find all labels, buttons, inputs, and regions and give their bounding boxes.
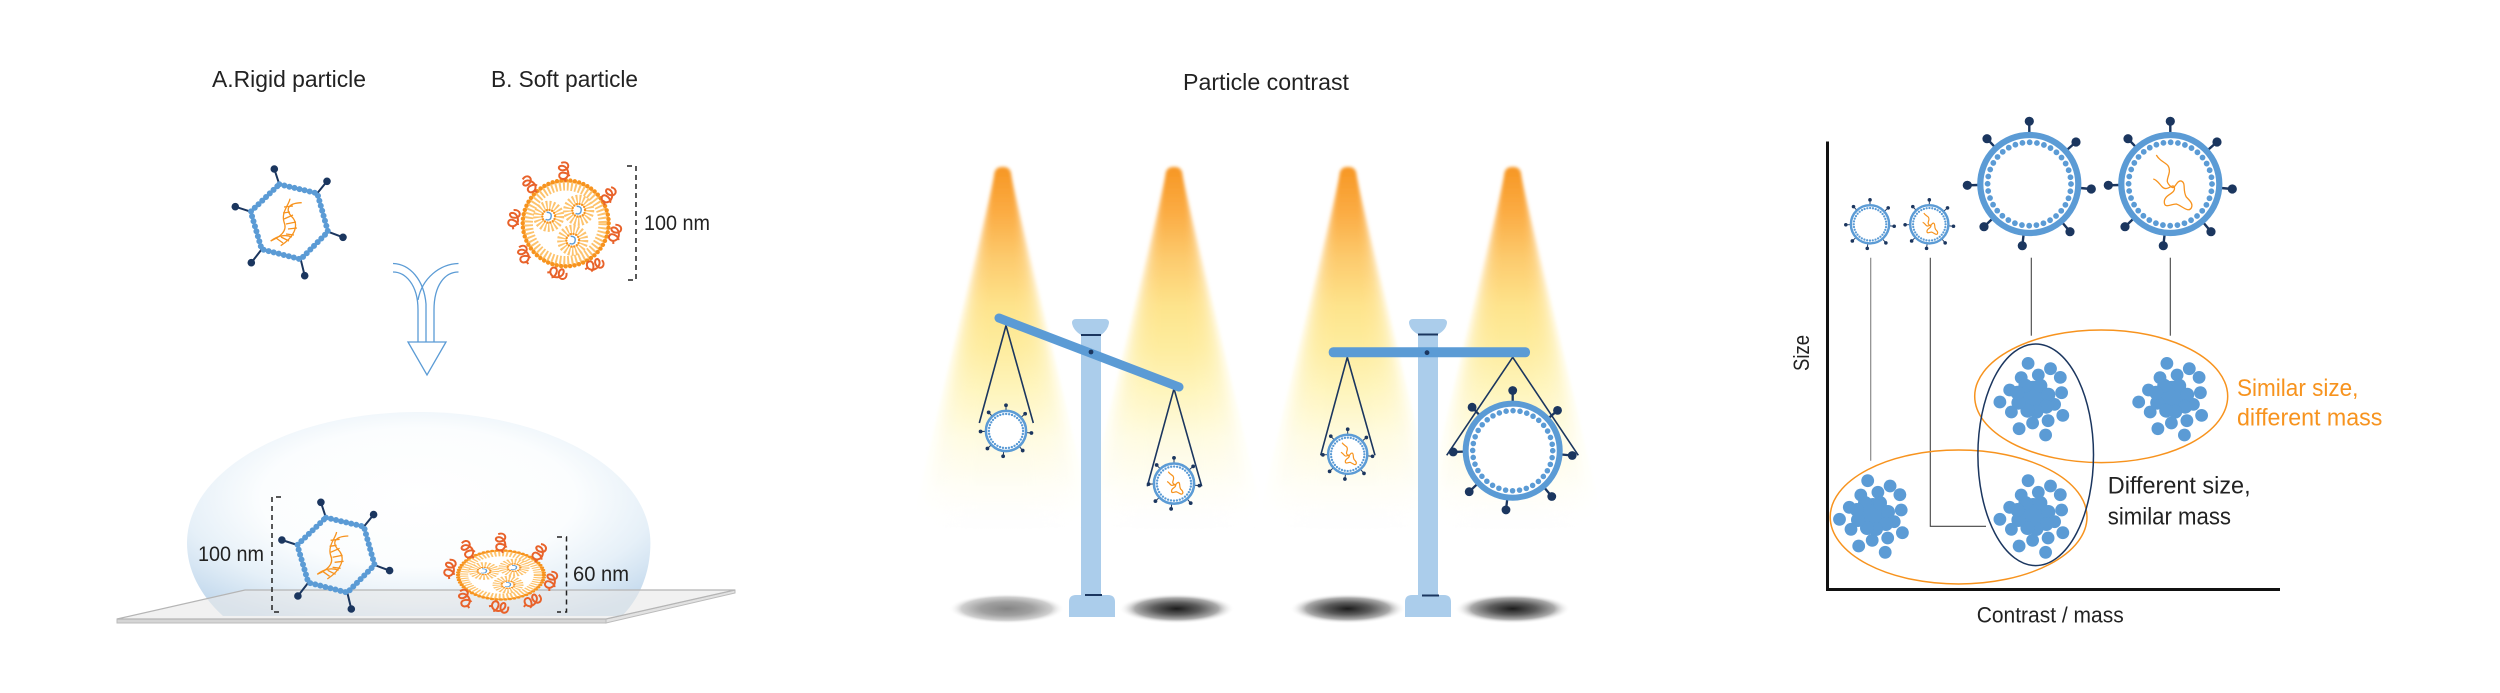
- connector lines: [1871, 258, 2170, 526]
- scene: droplet on surface: [117, 412, 735, 623]
- beam: [1329, 347, 1530, 357]
- column capital: [1409, 319, 1447, 334]
- callout: similar size, different mass: different mass: [2237, 405, 2382, 432]
- callout: similar size, different mass: Similar size,: [2237, 375, 2358, 402]
- callout: similar size, different mass: [2237, 375, 2382, 432]
- axes: [1828, 142, 2280, 590]
- hanger left: [979, 326, 1033, 423]
- arrow: merging particles: [393, 264, 458, 375]
- hanger right: [1147, 389, 1202, 486]
- column: [1418, 334, 1438, 595]
- icon: small loaded particle: [1903, 198, 1955, 250]
- empty particle: [979, 403, 1033, 458]
- deformed soft particle: [443, 533, 558, 614]
- icon: large loaded particle: [2104, 117, 2237, 250]
- ellipse: similar mass: [1978, 344, 2094, 566]
- droplet dome: [187, 412, 650, 616]
- ellipse: similar size bottom: [1830, 450, 2087, 584]
- light cones: [911, 167, 1605, 530]
- hanger left: [1321, 357, 1375, 455]
- balance: level: [1321, 319, 1578, 617]
- heading: B. Soft particle: B. Soft particle: [491, 66, 638, 92]
- label: 60 nm: 60 nm: [573, 563, 629, 586]
- beam: [999, 318, 1179, 387]
- panel: rigid vs soft particle: [117, 66, 735, 623]
- column base: [1069, 595, 1115, 617]
- icon: small empty particle: [1844, 198, 1896, 250]
- rigid particle on surface: [279, 500, 392, 612]
- x axis label: Contrast / mass: Contrast / mass: [1977, 603, 2124, 628]
- floor shadows: [949, 594, 1571, 624]
- panel: particle contrast balances: [911, 69, 1605, 624]
- icon: soft lipid particle: [507, 162, 622, 280]
- heading: A. Rigid particle: A.Rigid particle: [212, 66, 366, 92]
- column: [1081, 335, 1101, 595]
- hanger right: [1447, 357, 1578, 455]
- large empty particle: [1449, 386, 1577, 514]
- heading: Particle contrast: Particle contrast: [1183, 69, 1350, 95]
- balance: tilted: [979, 318, 1202, 617]
- column capital: [1072, 319, 1109, 335]
- label: 100 nm: 100 nm: [644, 212, 710, 235]
- label: 100 nm rigid: 100 nm: [198, 543, 264, 566]
- panel: size vs contrast chart: [1789, 117, 2382, 628]
- scatter clusters: [1833, 357, 2208, 559]
- icon: rigid hexagonal particle: [232, 166, 346, 279]
- column base: [1405, 595, 1451, 617]
- bracket: 100 nm soft particle: [627, 166, 636, 280]
- callout: different size, similar mass: Different size,: [2108, 472, 2251, 499]
- ellipse: similar size top: [1975, 330, 2228, 463]
- y axis label: Size: Size: [1789, 335, 1814, 371]
- loaded particle: [1321, 427, 1374, 481]
- bracket: 100 nm rigid: [272, 497, 281, 612]
- icon: large empty particle: [1963, 117, 2096, 250]
- callout: different size, similar mass: similar mass: [2108, 503, 2231, 530]
- callout: different size, similar mass: [2108, 472, 2251, 530]
- loaded particle: [1147, 456, 1201, 511]
- bracket: 60 nm: [557, 537, 566, 612]
- glass surface: [117, 590, 735, 623]
